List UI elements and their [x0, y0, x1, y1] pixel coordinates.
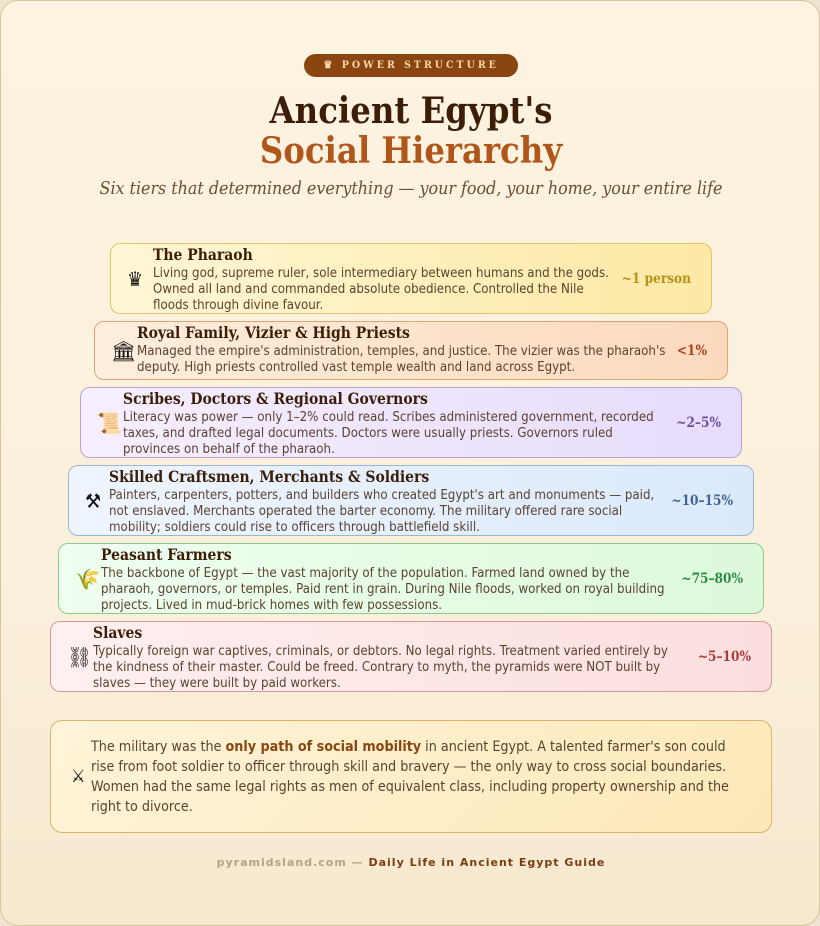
- description: Managed the empire's administration, temples, and justice. The vizier was the pharaoh's deputy. High priests controlled vast temple wealth and land across Egypt.: [137, 344, 665, 375]
- percentage: ~1 person: [622, 270, 691, 286]
- tier 5: peasants: [58, 543, 764, 614]
- subtitle: Six tiers that determined everything — your food, your home, your entire life: [100, 179, 722, 199]
- icon: scroll: 📜: [97, 410, 122, 434]
- description: Living god, supreme ruler, sole intermediary between humans and the gods. Owned all land and commanded absolute obedience. Controlled the Nile floods through divine favour.: [153, 266, 609, 313]
- callout text: The military was the only path of social mobility in ancient Egypt. A talented farmer's son could rise from foot soldier to officer through skill and bravery — the only way to cross social boundaries. Women had the same legal rights as men of equivalent class, including property ownership and the right to divorce.: [91, 739, 729, 815]
- description: Painters, carpenters, potters, and builders who created Egypt's art and monuments — paid, not enslaved. Merchants operated the barter economy. The military offered rare social mobility; soldiers could rise to officers through battlefield skill.: [109, 488, 654, 535]
- icon: swords: ⚔: [71, 766, 86, 787]
- heading: Scribes, Doctors & Regional Governors: [123, 389, 428, 408]
- callout: social mobility: [50, 720, 772, 833]
- tier 3: scribes: [80, 387, 742, 458]
- badge: power structure: ♛ POWER STRUCTURE: [323, 59, 499, 71]
- percentage: ~75–80%: [681, 570, 743, 586]
- description: Literacy was power — only 1–2% could read. Scribes administered government, recorded taxes, and drafted legal documents. Doctors were usually priests. Governors ruled provinces on behalf of the pharaoh.: [123, 410, 654, 457]
- percentage: ~5–10%: [698, 648, 751, 664]
- title line 1: Ancient Egypt's: [270, 90, 552, 132]
- tier 4: craftsmen: [68, 465, 754, 536]
- heading: Slaves: [93, 623, 142, 642]
- title line 2: Social Hierarchy: [260, 130, 562, 172]
- badge: power structure: [304, 54, 518, 77]
- tier 1: pharaoh: [110, 243, 712, 314]
- percentage: <1%: [677, 342, 707, 358]
- tier 6: slaves: [50, 621, 772, 692]
- icon: chains: ⛓: [67, 644, 92, 668]
- heading: The Pharaoh: [153, 245, 253, 264]
- percentage: ~10–15%: [671, 492, 733, 508]
- description: The backbone of Egypt — the vast majority of the population. Farmed land owned by the pharaoh, governors, or temples. Paid rent in grain. During Nile floods, worked on royal building projects. Lived in mud-brick homes with few possessions.: [101, 566, 665, 613]
- heading: Peasant Farmers: [101, 545, 232, 564]
- heading: Skilled Craftsmen, Merchants & Soldiers: [109, 467, 429, 486]
- tier 2: royal family: [94, 321, 728, 380]
- icon: temple: 🏛: [111, 338, 136, 362]
- description: Typically foreign war captives, criminals, or debtors. No legal rights. Treatment varied entirely by the kindness of their master. Could be freed. Contrary to myth, the pyramids were NOT built by slaves — they were built by paid workers.: [93, 644, 668, 691]
- icon: tools: ⚒: [85, 488, 101, 512]
- heading: Royal Family, Vizier & High Priests: [137, 323, 410, 342]
- icon: wheat: 🌾: [75, 566, 100, 590]
- percentage: ~2–5%: [676, 414, 721, 430]
- icon: crown: ♛: [127, 266, 143, 290]
- footer: pyramidsland.com — Daily Life in Ancient Egypt Guide: [217, 856, 605, 869]
